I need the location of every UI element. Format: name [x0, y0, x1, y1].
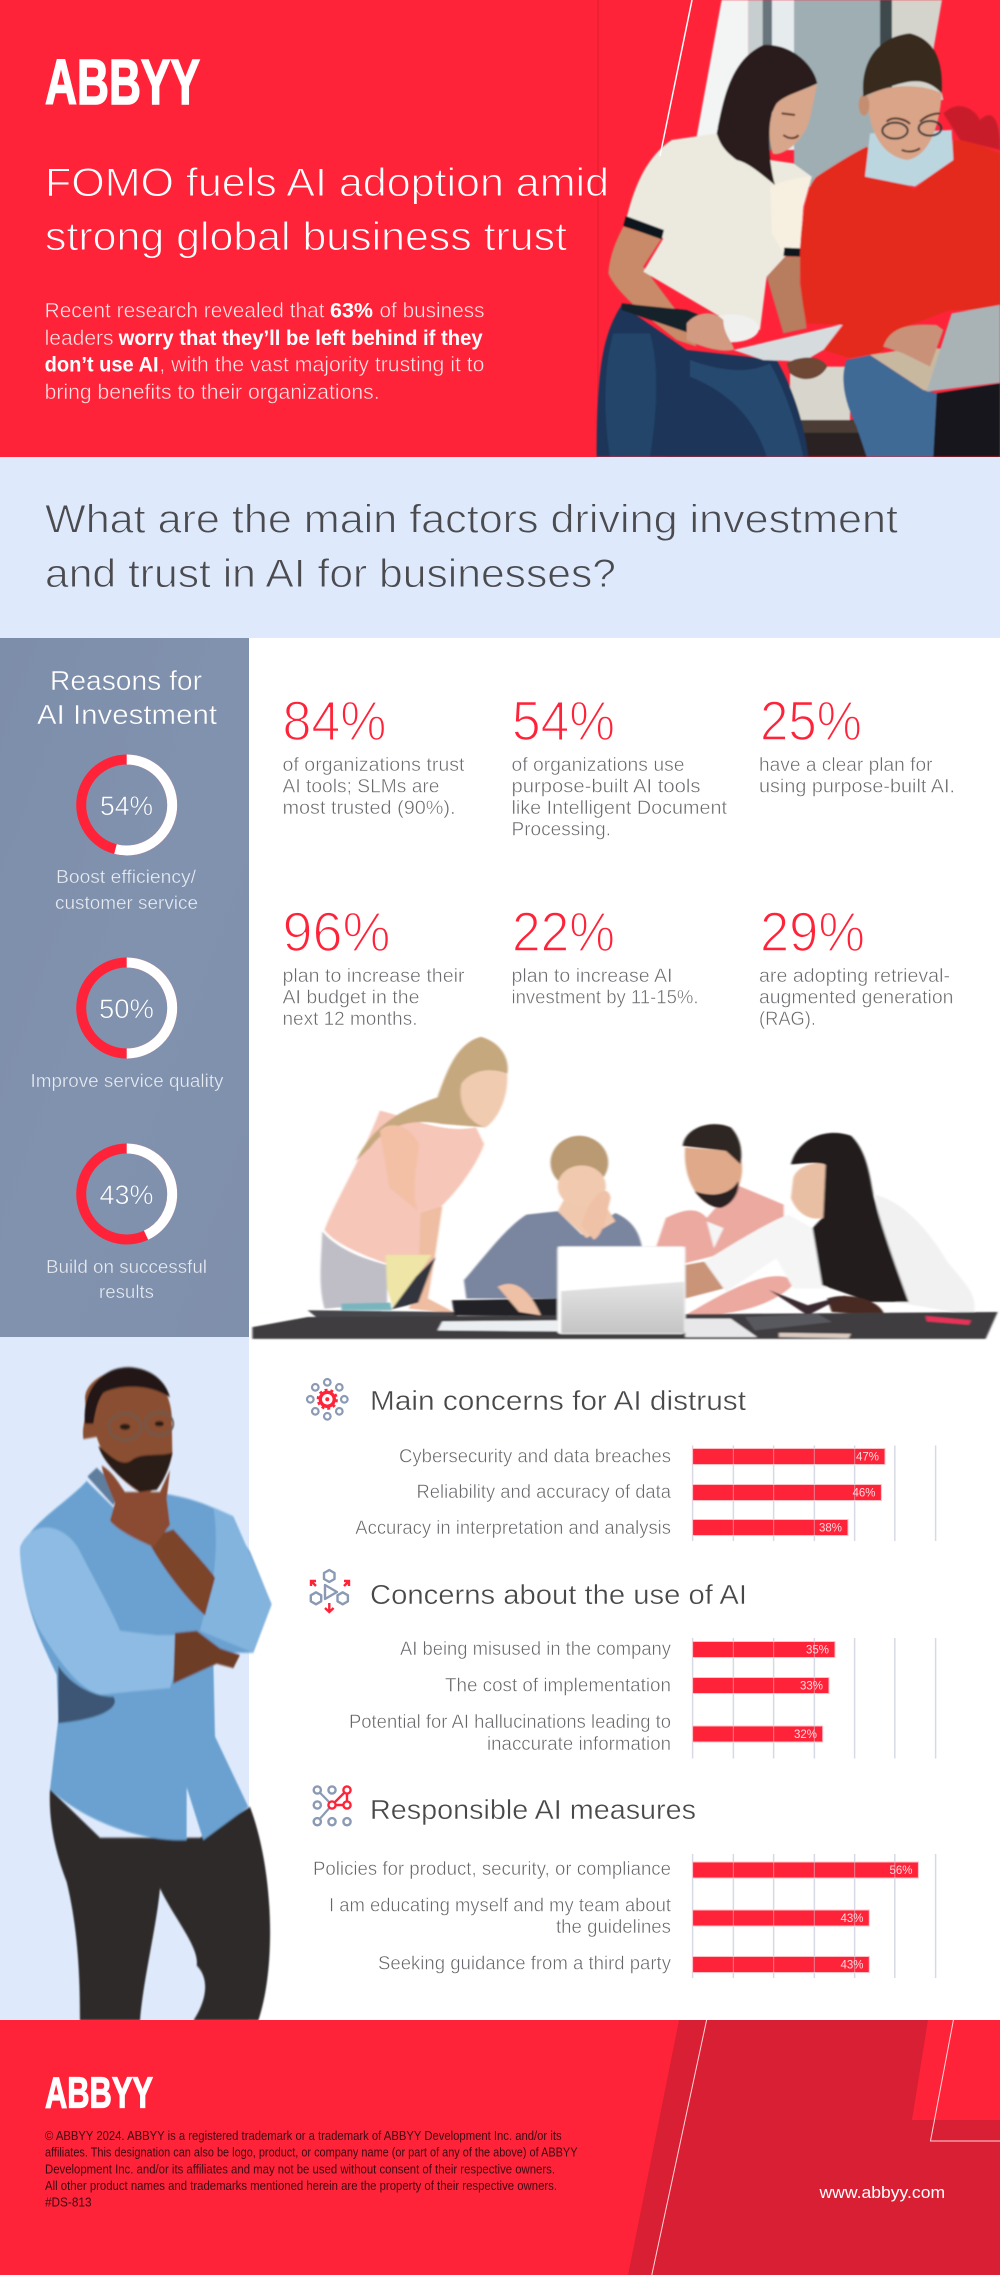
website url: www.abbyy.com	[818, 2183, 945, 2202]
row: policies: 56%	[890, 1865, 912, 1877]
donut: 50%	[81, 962, 172, 1054]
stat: 84%: most trusted (90%).	[282, 798, 456, 819]
title: FOMO fuels AI adoption amid	[45, 161, 609, 205]
row: cybersecurity: 47%	[856, 1452, 879, 1464]
heading: responsible AI: Responsible AI measures	[370, 1794, 696, 1825]
stat: 25%	[759, 689, 955, 798]
stat: 25%: have a clear plan for	[759, 755, 933, 776]
heading: main question	[45, 498, 898, 596]
heading: concerns about use: Concerns about the use of AI	[370, 1579, 747, 1610]
label: build on successful results	[46, 1256, 207, 1302]
photo: two colleagues with laptop	[597, 0, 1000, 457]
stat: 96%	[282, 900, 465, 1030]
stat: 29%: augmented generation	[759, 988, 954, 1008]
stat: 22%: 22%	[512, 900, 615, 963]
chart: concerns about use	[349, 1638, 936, 1758]
donut: 54%: 54%	[100, 791, 153, 821]
row: accuracy	[355, 1518, 848, 1539]
stat: 29%	[759, 900, 954, 1030]
panel: hero	[0, 0, 1000, 457]
stat: 96%: 96%	[282, 900, 390, 963]
row: cybersecurity	[399, 1447, 885, 1468]
label: boost efficiency	[55, 866, 198, 913]
row: guidance: 43%	[840, 1960, 864, 1972]
legal text: All other product names and trademarks mentioned herein are the property of their respective owners.	[45, 2178, 557, 2193]
intro text: leaders	[45, 327, 114, 350]
heading: main question: and trust in AI for businesses?	[45, 552, 616, 596]
stat: 29%: (RAG).	[759, 1009, 816, 1030]
row: misuse	[400, 1639, 835, 1660]
intro text: Recent research revealed that	[45, 300, 325, 322]
stat: 54%: 54%	[512, 689, 615, 752]
donut: 43%: 43%	[100, 1180, 154, 1210]
panel: light blue backdrop with thinking man	[0, 1337, 272, 2021]
row: cost: 33%	[800, 1680, 823, 1692]
stat: 54%: of organizations use	[512, 755, 684, 776]
intro text: 63%	[330, 300, 373, 322]
row: cost: The cost of implementation	[445, 1676, 671, 1697]
stat: 54%: like Intelligent Document	[512, 798, 728, 819]
row: accuracy: Accuracy in interpretation and analysis	[355, 1518, 671, 1539]
stat: 84%: 84%	[282, 689, 386, 752]
stat: 22%: plan to increase AI	[512, 966, 672, 987]
decorative white slanted line	[660, 0, 692, 156]
panel: reasons for AI investment	[0, 638, 249, 1337]
row: reliability: Reliability and accuracy of data	[416, 1482, 671, 1503]
stat: 54%: Processing.	[512, 820, 611, 840]
row: misuse: AI being misused in the company	[400, 1639, 671, 1660]
intro text: don’t use AI	[45, 354, 159, 376]
donut: 50%: 50%	[99, 994, 154, 1024]
icon: gear with nodes	[307, 1379, 348, 1420]
intro text: , with the vast majority trusting it to	[159, 354, 484, 376]
man	[800, 140, 1000, 358]
heading: reasons: Reasons for	[50, 665, 202, 696]
woman	[597, 305, 808, 457]
stat: 84%: of organizations trust	[282, 755, 465, 776]
heading: main question: What are the main factors driving investment	[45, 498, 898, 542]
row: misuse: 35%	[806, 1644, 829, 1656]
row: policies: Policies for product, security, or compliance	[313, 1859, 671, 1880]
panel: question band	[0, 457, 1000, 638]
stat: 96%: AI budget in the	[282, 988, 420, 1008]
legal text: #DS-813	[45, 2195, 92, 2210]
legal text: © ABBYY 2024. ABBYY is a registered trademark or a trademark of ABBYY Development Inc. and/or its	[45, 2128, 562, 2143]
heading: reasons	[37, 665, 217, 730]
stat: 25%: using purpose-built AI.	[759, 776, 955, 798]
title: strong global business trust	[45, 215, 567, 259]
row: accuracy: 38%	[819, 1522, 842, 1534]
man	[656, 1184, 784, 1263]
photo: team around a laptop	[252, 1037, 998, 1339]
row: hallucinations	[349, 1712, 823, 1755]
legal text: affiliates. This designation can also be logo, product, or company name (or part of any of the above) of ABBYY	[45, 2145, 578, 2160]
row: hallucinations: 32%	[794, 1729, 817, 1741]
title	[45, 161, 609, 259]
row: cybersecurity: Cybersecurity and data breaches	[399, 1447, 671, 1468]
row: guidance: Seeking guidance from a third party	[378, 1954, 671, 1975]
stat: 54%	[512, 689, 728, 840]
stat: 22%	[512, 900, 698, 1008]
chart: responsible AI measures	[313, 1854, 936, 1978]
donut: 43%	[81, 1148, 172, 1240]
row: hallucinations: inaccurate information	[487, 1734, 671, 1755]
panel: footer	[0, 2020, 1000, 2275]
label: boost efficiency: customer service	[55, 892, 198, 913]
intro text: bring benefits to their organizations.	[45, 381, 380, 404]
legal text	[45, 2128, 578, 2210]
stat: 84%: AI tools; SLMs are	[282, 776, 440, 798]
stat: 96%: next 12 months.	[282, 1009, 418, 1030]
label: build on successful results: results	[99, 1281, 154, 1302]
row: educating: the guidelines	[556, 1917, 671, 1938]
logo: ABBYY small: ABBYY	[45, 2069, 153, 2118]
row: educating	[329, 1896, 869, 1938]
chart: main concerns	[355, 1446, 936, 1541]
stat: 22%: investment by 11-15%.	[512, 988, 698, 1008]
row: educating: I am educating myself and my team about	[329, 1896, 672, 1916]
row: guidance	[378, 1954, 869, 1975]
woman right	[685, 1276, 796, 1315]
stat: 54%: purpose-built AI tools	[512, 776, 700, 798]
stat: 84%	[282, 689, 465, 819]
panel: key statistics	[282, 689, 955, 1030]
icon: hexagons with play triangle	[311, 1570, 349, 1612]
row: educating: 43%	[840, 1913, 864, 1925]
row: reliability: 46%	[852, 1488, 876, 1500]
woman centre	[452, 1299, 560, 1316]
intro text: worry that they’ll be left behind if they	[118, 327, 483, 350]
stat: 25%: 25%	[760, 689, 862, 752]
label: improve service quality: Improve service quality	[30, 1070, 224, 1091]
intro text	[45, 300, 484, 404]
logo: ABBYY: ABBYY	[45, 46, 200, 118]
legal text: Development Inc. and/or its affiliates and may not be used without consent of their respective owners.	[45, 2161, 555, 2176]
row: policies	[313, 1859, 918, 1880]
stat: 29%: 29%	[760, 900, 865, 963]
heading: main concerns: Main concerns for AI distrust	[370, 1385, 746, 1416]
row: reliability	[416, 1482, 881, 1503]
label: boost efficiency: Boost efficiency/	[56, 866, 197, 887]
label: build on successful results: Build on successful	[46, 1256, 207, 1277]
stat: 96%: plan to increase their	[282, 966, 465, 987]
intro text: of business	[380, 300, 484, 322]
photo: thinking man	[20, 1367, 272, 2021]
donut: 54%	[81, 760, 172, 850]
icon: node network	[314, 1786, 351, 1825]
row: hallucinations: Potential for AI hallucinations leading to	[349, 1712, 671, 1733]
heading: reasons: AI Investment	[37, 699, 217, 730]
row: cost	[445, 1676, 829, 1697]
stat: 29%: are adopting retrieval-	[759, 966, 950, 987]
